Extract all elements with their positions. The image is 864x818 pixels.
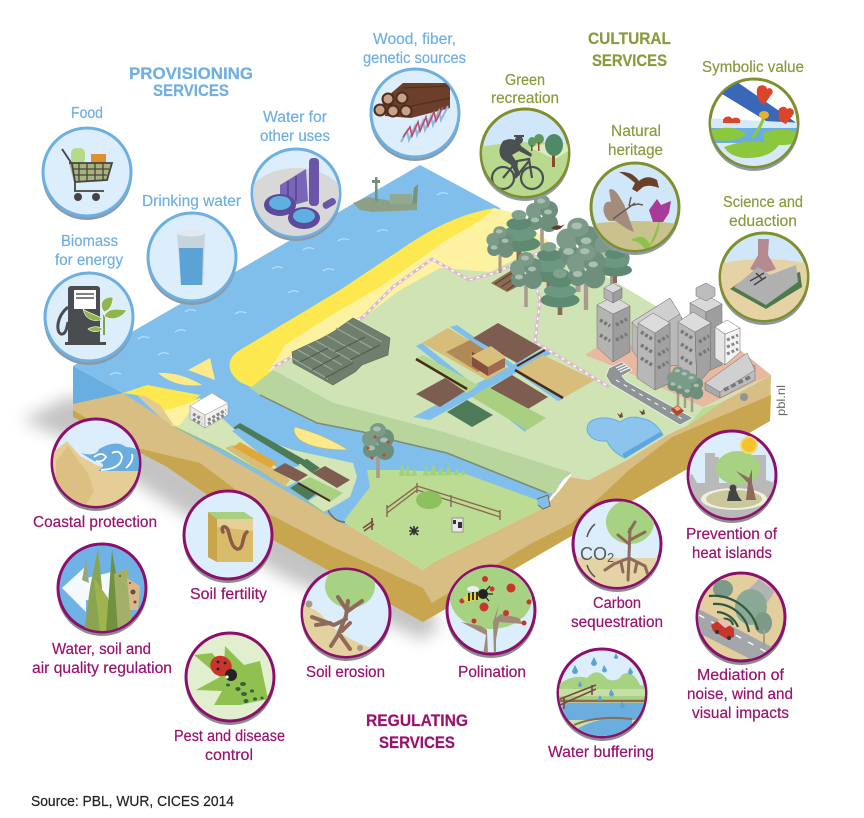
dike along the river bbox=[250, 370, 572, 493]
heading: cultural services: CULTURAL bbox=[588, 29, 671, 48]
icon: biomass bbox=[44, 273, 134, 365]
label: drinking water: Drinking water bbox=[142, 193, 241, 210]
label: natural heritage: Natural bbox=[611, 123, 661, 140]
label: prevention of heat islands bbox=[686, 526, 778, 562]
label: symbolic value: Symbolic value bbox=[702, 59, 804, 76]
farmhouse bbox=[471, 346, 506, 376]
heading: regulating services bbox=[366, 711, 468, 752]
label: wood, fiber, genetic sources: genetic sources bbox=[363, 50, 466, 67]
farm fields bbox=[413, 323, 595, 432]
sea and river bbox=[73, 165, 570, 525]
south meadow bbox=[343, 470, 545, 570]
bush bbox=[416, 491, 442, 509]
label: carbon sequestration: sequestration bbox=[571, 614, 663, 631]
orchard tree bbox=[362, 423, 394, 478]
heading: provisioning services: SERVICES bbox=[153, 81, 229, 100]
fence bbox=[387, 483, 500, 520]
right soil wall bbox=[423, 375, 771, 622]
west land bbox=[165, 398, 357, 512]
label: water, soil and air quality regulation: Water, soil and bbox=[52, 641, 151, 658]
reeds bbox=[399, 462, 465, 477]
label: water, soil and air quality regulation: air quality regulation bbox=[32, 660, 172, 677]
label: water, soil and air quality regulation bbox=[32, 641, 172, 677]
icon: polination bbox=[446, 566, 536, 658]
back house bbox=[632, 298, 682, 368]
label: soil erosion: Soil erosion bbox=[306, 664, 385, 681]
south beach bbox=[123, 385, 200, 417]
label: soil fertility: Soil fertility bbox=[190, 586, 267, 603]
label: carbon sequestration: Carbon bbox=[593, 595, 641, 612]
pond bbox=[587, 409, 663, 458]
log pile bbox=[491, 268, 530, 292]
label: pest and disease control bbox=[174, 728, 285, 764]
coastal building bbox=[190, 393, 228, 428]
landscape block bbox=[73, 165, 771, 622]
heading: cultural services: SERVICES bbox=[592, 51, 667, 70]
icon: science and education bbox=[714, 233, 814, 327]
icon: drinking water bbox=[147, 213, 237, 305]
label: coastal protection: Coastal protection bbox=[33, 514, 157, 531]
label: science and education: eduaction bbox=[729, 213, 797, 230]
label: natural heritage bbox=[608, 123, 663, 159]
icon: coastal protection bbox=[46, 419, 146, 513]
icon: water for other uses bbox=[246, 149, 346, 241]
label: prevention of heat islands: Prevention of bbox=[686, 526, 778, 543]
label: prevention of heat islands: heat islands bbox=[692, 545, 772, 562]
label: green recreation bbox=[491, 72, 559, 107]
label: water buffering: Water buffering bbox=[548, 744, 654, 761]
heading: provisioning services bbox=[129, 64, 253, 100]
label: green recreation: Green bbox=[505, 72, 545, 89]
label: biomass for energy: for energy bbox=[55, 252, 123, 269]
beach bbox=[230, 208, 549, 392]
label: water for other uses bbox=[260, 109, 330, 145]
block shadow bbox=[22, 395, 440, 640]
left soil wall bbox=[73, 393, 423, 622]
small bird bbox=[551, 224, 565, 230]
heading: cultural services bbox=[588, 29, 671, 70]
car bbox=[671, 405, 684, 416]
west fields bbox=[225, 423, 350, 502]
heading: provisioning services: PROVISIONING bbox=[129, 64, 253, 83]
tower 4 bbox=[678, 312, 711, 385]
islands bbox=[158, 358, 348, 450]
street trees bbox=[667, 366, 689, 405]
label: water for other uses: Water for bbox=[263, 109, 327, 126]
label: polination: Polination bbox=[458, 664, 526, 681]
label: carbon sequestration bbox=[571, 595, 663, 631]
label: natural heritage: heritage bbox=[608, 142, 663, 159]
icon: green recreation bbox=[475, 109, 575, 203]
label: food: Food bbox=[71, 105, 103, 122]
tower 1 bbox=[597, 283, 630, 362]
greenhouses bbox=[292, 318, 390, 385]
icon: soil erosion bbox=[296, 564, 391, 663]
manhole bbox=[740, 393, 748, 401]
sea wavelets bbox=[110, 193, 448, 375]
label: mediation of noise, wind and visual impacts bbox=[687, 667, 793, 722]
label: pest and disease control: Pest and disease bbox=[174, 728, 285, 745]
white flats bbox=[715, 320, 740, 365]
label: mediation of noise, wind and visual impacts: Mediation of bbox=[697, 667, 785, 684]
trees and woods bbox=[486, 195, 632, 315]
label: water for other uses: other uses bbox=[260, 128, 330, 145]
road bbox=[606, 362, 693, 425]
label: biomass for energy: Biomass bbox=[61, 233, 118, 250]
icon: carbon sequestration bbox=[567, 500, 667, 594]
label: wood, fiber, genetic sources bbox=[363, 31, 466, 67]
footpath bbox=[272, 250, 609, 387]
tower 5 bbox=[690, 283, 722, 372]
small fence bbox=[363, 518, 374, 531]
label: CO2: 2 bbox=[607, 550, 614, 565]
water front face bbox=[73, 366, 123, 404]
label: wood, fiber, genetic sources: Wood, fiber, bbox=[373, 31, 456, 48]
label: pest and disease control: control bbox=[205, 747, 253, 764]
label: CO2: CO bbox=[580, 544, 607, 564]
source line: Source: PBL, WUR, CICES 2014 bbox=[31, 793, 234, 810]
front house bbox=[705, 353, 755, 398]
icon: prevention of heat islands bbox=[682, 431, 782, 525]
heading: regulating services: REGULATING bbox=[366, 711, 468, 730]
heading: regulating services: SERVICES bbox=[379, 733, 455, 752]
boat bbox=[353, 177, 418, 212]
bird on meadow bbox=[409, 526, 419, 535]
icon: pest and disease control bbox=[185, 633, 275, 725]
mainland bbox=[273, 242, 771, 480]
icon: mediation bbox=[696, 572, 786, 665]
icon: symbolic value bbox=[708, 78, 800, 171]
cow bbox=[452, 518, 463, 532]
icon: water, soil and air quality regulation bbox=[57, 544, 147, 636]
icon: natural heritage bbox=[585, 163, 685, 257]
attribution: pbl.nl bbox=[774, 385, 788, 416]
label: science and education bbox=[723, 194, 803, 230]
icon: soil fertility bbox=[183, 491, 273, 583]
label: mediation of noise, wind and visual impacts: noise, wind and bbox=[687, 686, 793, 703]
label: green recreation: recreation bbox=[491, 90, 559, 107]
city bbox=[585, 283, 771, 425]
label: biomass for energy bbox=[55, 233, 123, 269]
label: science and education: Science and bbox=[723, 194, 803, 211]
icon: wood, fiber, genetic sources bbox=[370, 69, 460, 161]
icon: water buffering bbox=[556, 648, 648, 741]
tower 3 bbox=[637, 313, 670, 390]
icon: food bbox=[42, 128, 132, 220]
label: mediation of noise, wind and visual impacts: visual impacts bbox=[692, 705, 789, 722]
